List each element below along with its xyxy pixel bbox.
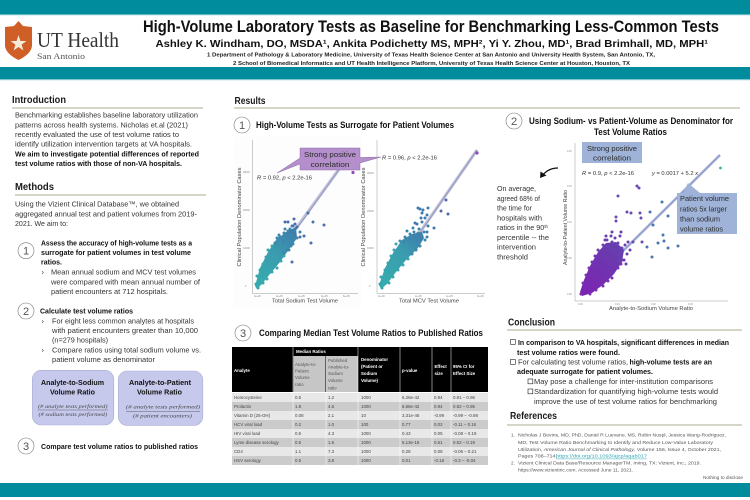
arrow: curved pointer [540, 168, 558, 178]
table rows: 1.8 [295, 404, 302, 409]
table rows: 0.43 [402, 431, 411, 436]
formula box: analyte-to-sodium: (# sodium tests performed) [38, 411, 107, 418]
table header: ratio [328, 386, 337, 390]
text: reference list: 1. [511, 433, 515, 438]
heading: result 3: Comparing Median Test Volume Ratios to Published Ratios [259, 328, 483, 338]
heading: result 2 [529, 116, 733, 137]
table rows: Homocysteine [234, 395, 262, 400]
scatter chart: sodium: 20000 [243, 209, 250, 212]
table rows: Lyme disease serology [234, 440, 280, 445]
text: conclusion bullets: high-volume tests are an [630, 358, 712, 367]
callout: patient volume ratios: ratios 5x larger [680, 204, 728, 213]
callout: strong positive correlation [277, 148, 381, 173]
table rows: HIV viral load [234, 431, 261, 436]
table header: Denominator [361, 357, 388, 362]
text: agreement note: th [544, 224, 548, 229]
scatter chart: sodium: Total Sodium Test Volume [272, 298, 338, 304]
heading: methods: Methods [15, 182, 54, 193]
step 2: › [42, 345, 44, 354]
table rows: 1000 [361, 431, 371, 436]
table header: Volume [328, 378, 343, 383]
text: introduction body: recently evaluated the use of test volume ratios to [15, 130, 179, 139]
heading: introduction: Introduction [12, 95, 66, 106]
callout: patient volume ratios: Patient volume [680, 194, 729, 203]
text: reference list: Pages 708–714, [518, 454, 557, 459]
panel: introduction [12, 95, 203, 168]
scatter chart: MCV: 0 [369, 285, 371, 288]
icon: number 1 [18, 243, 34, 259]
text: conclusion bullets: May pose a challenge for inter-institution comparisons [534, 377, 713, 386]
icon: number 3 [18, 438, 34, 454]
scatter chart: analyte ratios: 0.01 [615, 303, 620, 306]
text: conclusion bullets: In comparison to VA hospitals, significant differences in median [518, 338, 729, 347]
table rows: -0.99 [434, 413, 445, 418]
text: introduction body: patterns across health systems. Nicholas et.al (2021) [15, 120, 188, 129]
table rows: -0.18 [434, 458, 445, 463]
step 2: Calculate test volume ratios [40, 306, 133, 315]
table rows: HCV viral load [234, 422, 263, 427]
table rows: 1.2 [328, 395, 335, 400]
scatter chart: sodium: 0e+00 [254, 295, 261, 298]
table rows: 0.2 [295, 422, 302, 427]
icon: number 3: 3 [240, 328, 246, 340]
text: reference list: https://doi.org/10.1093/ajcp/aqab017 [556, 454, 648, 459]
scatter chart: analyte ratios: Analyte-to-Patient Volume Ratio [563, 190, 569, 265]
formula box: analyte-to-patient: Volume Ratio [137, 388, 182, 397]
text: methods intro: aggregated annual test and patient volumes from 2019- [15, 209, 198, 218]
callout: strong positive correlation: correlation [310, 160, 350, 169]
text: introduction body: Benchmarking establishes baseline laboratory utilization [15, 111, 198, 120]
text: conclusion bullets [510, 338, 729, 406]
text: conclusion bullets: test volume ratios were found. [517, 348, 620, 357]
text: methods intro [15, 200, 198, 228]
step 2: (n=279 hospitals) [52, 336, 108, 345]
table rows: 0.6 [295, 431, 302, 436]
table rows: 7.3 [328, 449, 335, 454]
scatter chart: MCV: Clinical Population Denominator Cases [361, 167, 367, 266]
table header: Patient [295, 368, 309, 374]
scatter chart: MCV: 10000 [367, 247, 374, 250]
scatter chart: sodium: R = 0.92, p < 2.2e-16 [257, 176, 312, 182]
step 2: › [42, 316, 44, 325]
table rows: 1000 [361, 395, 371, 400]
step 1: Assess the accuracy of high-volume tests as a [41, 238, 193, 247]
table rows: 1000 [361, 404, 371, 409]
table rows: Vitamin D (25-OH) [234, 413, 271, 418]
scatter chart: sodium: 30000 [243, 171, 250, 174]
text: reference list [511, 433, 726, 473]
text: agreement note: agreed 68% of [497, 194, 541, 203]
scatter chart: MCV: 4e+05 [446, 295, 453, 298]
table rows: 3.8 [328, 458, 335, 463]
scatter chart: sodium: 6e+05 [321, 295, 328, 298]
table header: 95% CI for [453, 364, 475, 369]
scatter chart: MCV: 6e+05 [477, 295, 484, 298]
table rows: 4.3 [328, 431, 335, 436]
text: reference list: Nicholas J Bevins, MD, PhD, Daniel R Luevano, MS, Robin Nuspl, Jessica Wang-Rodriguez, [518, 433, 726, 438]
table header: Sodium [328, 371, 343, 376]
scatter chart: analyte ratios: 0.00 [567, 293, 572, 296]
text: agreement note: On average, [497, 184, 536, 193]
table rows: 0.94 [434, 404, 443, 409]
logo: UT Health San Antonio [5, 21, 119, 61]
table header: size [434, 371, 443, 376]
text: introduction body: test volume ratios with those of non-VA hospitals. [15, 159, 182, 168]
table header: Analyte-to- [295, 362, 317, 367]
scatter chart: analyte ratios: 0.10 [567, 221, 572, 224]
scatter chart: analyte ratios: 0.15 [567, 185, 572, 188]
text: agreement note: threshold [497, 252, 528, 261]
text: introduction body: We aim to investigate potential differences of reported [15, 149, 199, 158]
table rows: 1000 [361, 458, 371, 463]
table header: Sodium [361, 371, 377, 376]
text: agreement note: ratios in the 90 [497, 223, 545, 232]
table rows: 0.01 [402, 458, 411, 463]
table header: ratio [295, 382, 304, 387]
table rows: 1000 [361, 449, 371, 454]
scatter chart: MCV: 20000 [367, 210, 374, 213]
top teal band [0, 0, 750, 15]
scatter chart: sodium: 10000 [243, 247, 250, 250]
table rows: 3.31e-46 [402, 413, 420, 418]
table rows: Prolactin [234, 404, 252, 409]
callout: strong positive correlation: Strong positive [304, 150, 356, 159]
table header: (Patient or [361, 364, 383, 369]
step 3: Compare test volume ratios to published ratios [41, 442, 198, 451]
table rows: -0.06 – 0.21 [453, 449, 477, 454]
table header: Volume [295, 375, 310, 380]
scatter chart: analyte ratios: 0.03 [688, 303, 693, 306]
formula box: analyte-to-patient [118, 371, 203, 426]
table rows: 5.13e-19 [402, 440, 420, 445]
text: conclusion bullets: Standardization for quantifying high-volume tests would [534, 387, 718, 396]
table rows: 0.08 [295, 413, 304, 418]
icon: number 1 [234, 117, 250, 133]
callout: patient volume ratios: than sodium [680, 214, 720, 223]
affiliations: 1 Department of Pathology & Laboratory Medicine, University of Texas Health Science Center at San Antonio and University Health System, San Antonio, TX, [207, 52, 656, 58]
icon: shield [5, 21, 32, 60]
icon: number 2 [18, 303, 34, 319]
table rows: 0.5 [295, 440, 302, 445]
scatter chart: sodium: Clinical Population Denominator Cases [237, 167, 243, 266]
table rows: 0.6 [295, 395, 302, 400]
step 1: › [42, 268, 44, 277]
step 2: For eight less common analytes at hospitals [52, 316, 194, 325]
panel: result 1 high-volume surrogate [234, 117, 485, 307]
heading: result 1: High-Volume Tests as Surrogate for Patient Volumes [256, 120, 454, 130]
scatter chart: sodium: 0 [245, 285, 247, 288]
heading: result 2: Test Volume Ratios [594, 127, 667, 137]
table header: Volume) [361, 378, 379, 383]
icon: number 1: 1 [239, 120, 245, 132]
table rows: 0.5 [295, 458, 302, 463]
table rows [234, 395, 478, 463]
callout: strong positive correlation [582, 142, 642, 163]
scatter chart: MCV: 30000 [367, 172, 374, 175]
formula box: analyte-to-sodium: Analyte-to-Sodium [41, 378, 104, 387]
icon: number 3: 3 [23, 441, 29, 453]
table rows: 0.08 [434, 449, 443, 454]
icon: number 3 [235, 325, 251, 341]
panel: result 2 sodium vs patient denominator [497, 113, 737, 312]
formula box: analyte-to-patient: (# analyte tests performed) [126, 404, 200, 411]
text: agreement note [497, 184, 549, 261]
table rows: 100 [361, 422, 369, 427]
scatter chart: sodium: 8e+05 [343, 295, 350, 298]
step 1: ratios. [41, 258, 62, 267]
heading: references: References [510, 411, 557, 422]
scatter chart: sodium: 2e+05 [276, 295, 283, 298]
panel: references [507, 411, 743, 480]
icon: number 2: 2 [23, 306, 29, 318]
callout: strong positive correlation: correlation [593, 154, 631, 162]
scatter chart: MCV: 0e+00 [378, 295, 385, 298]
scatter chart: analyte ratios: Analyte-to-Sodium Volume Ratio [609, 306, 693, 312]
text: reference list: https://www.vizientinc.com. Accessed June 11, 2021. [518, 468, 633, 473]
table header [234, 349, 476, 390]
formula box: analyte-to-sodium [32, 370, 114, 425]
text: methods intro: Using the Vizient Clinical Database™, we obtained [15, 200, 179, 209]
table rows: 1.6 [328, 440, 335, 445]
formula box: analyte-to-patient: (# patient encounters) [133, 412, 192, 420]
text: agreement note: intervention [497, 242, 536, 252]
table rows: -0.11 – 0.16 [453, 422, 477, 427]
step 3 [18, 438, 198, 454]
table rows: 2.1 [328, 413, 335, 418]
table rows: 1.1 [295, 449, 302, 454]
formula box: analyte-to-sodium: Volume Ratio [50, 388, 95, 397]
logo: UT Health San Antonio: San Antonio [37, 51, 85, 61]
logo: UT Health San Antonio: UT Health [37, 28, 119, 52]
table rows: 6.66e-42 [402, 404, 420, 409]
step 2: patient volume as denominator [52, 355, 156, 364]
table rows: 1.0 [328, 422, 335, 427]
table rows: 4.6 [328, 404, 335, 409]
icon: number 2 [506, 113, 522, 129]
callout: strong positive correlation: Strong positive [587, 144, 637, 153]
affiliations: 2 School of Biomedical Informatics and UT Health Intelligence Platform, University of Texas Health Science Center at Houston, Houston, TX [233, 61, 630, 67]
step 2: Compare ratios using total sodium volume vs. [52, 345, 201, 354]
panel: result 3 comparing ratios [232, 325, 488, 465]
panel: conclusion [507, 318, 742, 406]
scatter chart: analyte ratios [563, 143, 728, 312]
table rows: CD4 [234, 449, 243, 454]
table header: Analyte-to- [328, 364, 350, 370]
text: agreement note: hospitals with [497, 213, 542, 222]
header teal band [0, 67, 750, 80]
text: conclusion bullets: For calculating test volume ratios, [518, 358, 628, 367]
scatter chart: MCV [361, 140, 485, 304]
text: introduction body: identify utilization intervention targets at VA hospitals. [15, 140, 192, 149]
scatter chart: MCV: Total MCV Test Volume [399, 298, 459, 304]
bottom teal band [0, 483, 750, 497]
scatter chart: analyte ratios: 0.05 [567, 257, 572, 260]
table rows: 1000 [361, 440, 371, 445]
table rows: 6.26e-42 [402, 395, 420, 400]
scatter chart: analyte ratios: 0.20 [567, 150, 572, 153]
table rows: -0.99 – -0.98 [453, 413, 478, 418]
table rows: 0.05 [434, 431, 443, 436]
table header: Analyte [234, 368, 250, 373]
table rows: 0.92 – 0.95 [453, 404, 476, 409]
scatter chart: MCV: 2e+05 [415, 295, 422, 298]
formula box: analyte-to-patient: Analyte-to-Patient [129, 378, 192, 387]
icon: number 2: 2 [511, 116, 517, 128]
text: reference list: MD, Test Volume Ratio Benchmarking to Identify and Reduce Low-Value Laboratory [518, 440, 714, 445]
scatter chart: analyte ratios: R = 0.9, p < 2.2e-16 [582, 171, 634, 177]
scatter chart: analyte ratios: 0.00 [578, 303, 583, 306]
table header: Effect Size [453, 371, 476, 376]
text: conclusion bullets: adequate surrogate for patient volumes. [517, 367, 653, 376]
table rows: 0.94 [434, 395, 443, 400]
scatter chart: analyte ratios: y = 0.0017 + 5.2 x [651, 171, 698, 177]
table header: Median Ratios [296, 349, 326, 354]
text: disclosure: Nothing to disclose [703, 475, 743, 480]
table rows: 0.91 – 0.96 [453, 395, 476, 400]
step 1 [18, 238, 201, 296]
table rows: 0.77 [402, 422, 411, 427]
heading: results: Results [234, 96, 266, 107]
table rows: 10 [361, 413, 366, 418]
table header: Published [328, 358, 348, 363]
table: median ratios [232, 347, 488, 465]
scatter chart: sodium [234, 137, 362, 307]
step 1: Mean annual sodium and MCV test volumes [51, 268, 196, 277]
scatter chart: sodium: 4e+05 [298, 295, 305, 298]
callout: patient volume ratios: volume ratios [680, 224, 723, 233]
table header: Effect [434, 364, 447, 369]
table rows: -0.08 – 0.19 [453, 431, 477, 436]
table rows: 0.02 [434, 422, 443, 427]
step 2: with patient encounters greater than 10,000 [51, 326, 198, 335]
formula box: analyte-to-sodium: (# analyte tests performed) [38, 403, 108, 410]
scatter chart: analyte ratios: 0.02 [651, 303, 656, 306]
text: agreement note: the time for [497, 204, 533, 212]
panel: methods [15, 182, 206, 454]
text: agreement note: percentile -- the [497, 233, 549, 242]
text: conclusion bullets: improve the use of test volume ratios for benchmarking [534, 397, 717, 406]
affiliations [207, 52, 656, 67]
authors: Ashley K. Windham, DO, MSDA¹, Ankita Podichetty MS, MPH², Yi Y. Zhou, MD¹, Brad Brimhall, MD, MPH¹ [156, 38, 709, 50]
text: introduction body [15, 111, 199, 168]
table rows: 0.52 – 0.19 [453, 440, 476, 445]
icon: number 1: 1 [23, 246, 29, 258]
step 1: surrogate for patient volumes in test volume [41, 248, 191, 257]
scatter chart: MCV: R = 0.96, p < 2.2e-16 [382, 156, 437, 162]
text: reference list: Vizient Clinical Data Base/Resource ManagerTM. Irving, TX: Vizient, Inc.; 2019. [518, 460, 701, 465]
table rows: -0.3 – -0.04 [453, 458, 476, 463]
table rows: HSV serology [234, 458, 262, 463]
table rows: 0.28 [402, 449, 411, 454]
text: reference list: Utilization, American Journal of Clinical Pathology , Volume 156, Issue 4, October 2021, [518, 447, 721, 452]
text: reference list: 2. [511, 460, 515, 465]
heading: conclusion: Conclusion [508, 318, 555, 329]
callout: patient volume ratios [677, 183, 737, 234]
step 2 [18, 303, 201, 364]
text: methods intro: 2021. We aim to: [15, 219, 68, 228]
table header: p-value [402, 368, 418, 373]
step 1: patient encounters at 712 hospitals. [51, 287, 168, 296]
step 1: were compared with mean annual number of [50, 277, 201, 286]
table rows: 0.61 [434, 440, 443, 445]
